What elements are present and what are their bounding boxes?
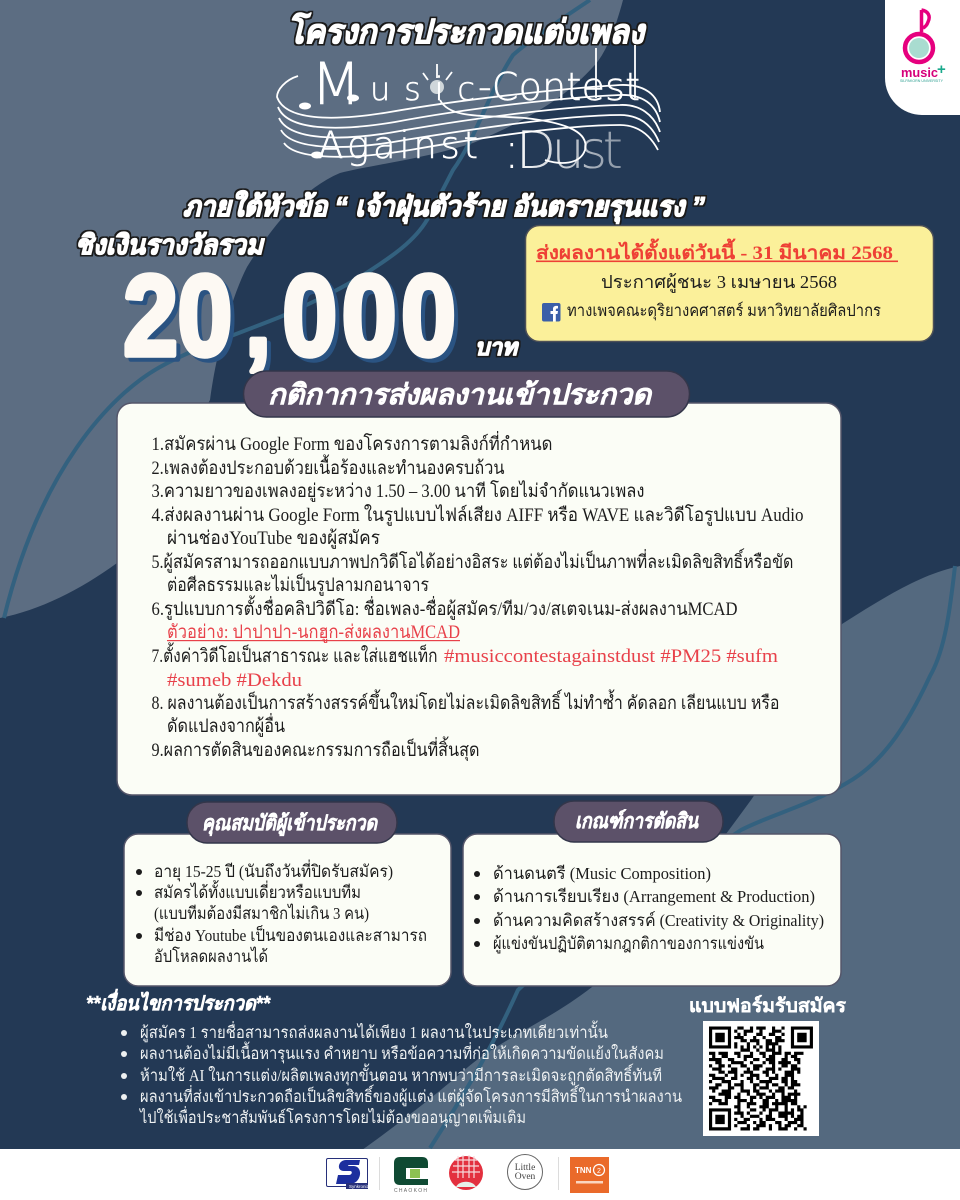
rules list: 5.ผู้สมัครสามารถออกแบบภาพปกวิดีโอได้อย่างอิสระ แต่ต้องไม่เป็นภาพที่ละเมิดลิขสิทธิ์หรือขัด — [152, 548, 794, 573]
heading pill: judging criteria: เกณฑ์การตัดสิน — [575, 809, 699, 833]
panel: dates — [526, 226, 934, 342]
conditions list: ไปใช้เพื่อประชาสัมพันธ์โครงการโดยไม่ต้องขออนุญาตเพิ่มเติม — [138, 1106, 526, 1128]
rules list: 3.ความยาวของเพลงอยู่ระหว่าง 1.50 – 3.00 นาที โดยไม่จำกัดแนวเพลง — [152, 480, 644, 502]
music contest logo: M — [311, 50, 361, 118]
rules list: ผ่านช่องYouTube ของผู้สมัคร — [167, 528, 380, 549]
prize amount: 2 — [127, 256, 182, 384]
conditions list: ผลงานต้องไม่มีเนื้อหารุนแรง คำหยาบ หรือข้อความที่ก่อให้เกิดความขัดแย้งในสังคม — [140, 1041, 664, 1064]
logo badge: Music+ Silpakorn University: music — [901, 65, 938, 80]
music contest logo: -Contest — [478, 65, 640, 109]
logo badge: Music+ Silpakorn University: SILPAKORN UNIVERSITY — [900, 79, 944, 83]
logo: Little Oven — [508, 1154, 542, 1190]
prize amount: 0 — [405, 256, 460, 384]
announcement date: ประกาศผู้ชนะ 3 เมษายน 2568 — [601, 272, 837, 293]
deadline: ส่งผลงานได้ตั้งแต่วันนี้ - 31 มีนาคม 2568 — [536, 238, 893, 264]
rules list: ต่อศีลธรรมและไม่เป็นรูปลามกอนาจาร — [167, 572, 429, 596]
logo: Little Oven: Oven — [515, 1172, 536, 1182]
logo badge: Music+ Silpakorn University — [885, 0, 960, 115]
prize amount: 0 — [342, 252, 396, 380]
criteria list: ด้านความคิดสร้างสรรค์ (Creativity & Originality) — [493, 911, 824, 930]
eligibility list: สมัครได้ทั้งแบบเดี่ยวหรือแบบทีม — [154, 880, 361, 902]
logo: TNN2: TNN — [575, 1166, 592, 1175]
prize amount: , — [246, 260, 271, 378]
logo: TNN2: 2 — [597, 1168, 601, 1175]
eligibility list — [136, 859, 427, 966]
rules list: 8. ผลงานต้องเป็นการสร้างสรรค์ขึ้นใหม่โดยไม่ละเมิดลิขสิทธิ์ ไม่ทำซ้ำ คัดลอก เลียนแบบ หรือ — [152, 689, 780, 714]
rules list: 2.เพลงต้องประกอบด้วยเนื้อร้องและทำนองครบถ้วน — [152, 454, 505, 479]
prize amount: 0 — [283, 252, 337, 380]
logo badge: Music+ Silpakorn University: + — [937, 61, 946, 78]
heading pill: eligibility: คุณสมบัติผู้เข้าประกวด — [202, 812, 378, 836]
rules list — [152, 431, 804, 762]
prize amount: 2 — [123, 252, 178, 380]
prize amount: 0 — [287, 256, 341, 384]
conditions list: ผลงานที่ส่งเข้าประกวดถือเป็นลิขสิทธิ์ของผู้แต่ง แต่ผู้จัดโครงการมีสิทธิ์ในการนำผลงาน — [140, 1084, 682, 1107]
panel: eligibility — [124, 834, 451, 986]
prize amount: 0 — [178, 252, 232, 380]
rules list: 7.ตั้งค่าวิดีโอเป็นสาธารณะ และใส่แฮชแท็ก — [152, 642, 438, 667]
conditions heading: **เงื่อนไขการประกวด** — [86, 989, 271, 1015]
logo: Synkronize: Synkronize — [349, 1184, 372, 1189]
rules list: 9.ผลการตัดสินของคณะกรรมการถือเป็นที่สิ้นสุด — [152, 736, 480, 762]
panel: rules — [117, 403, 841, 795]
rules list: 1.สมัครผ่าน Google Form ของโครงการตามลิงก์ที่กำหนด — [152, 431, 552, 455]
prize amount: , — [250, 264, 275, 382]
logo: Little Oven: Little — [515, 1163, 535, 1173]
prize amount: 0 — [401, 252, 456, 380]
application form heading: แบบฟอร์มรับสมัคร — [689, 995, 847, 1017]
logo: Synkronize — [326, 1158, 372, 1189]
logo: TNN2 — [570, 1157, 609, 1193]
heading pill: rules: กติกาการส่งผลงานเข้าประกวด — [268, 379, 653, 410]
heading pill: rules — [244, 371, 690, 417]
criteria list — [474, 864, 824, 954]
logo: shell emblem — [449, 1155, 483, 1190]
subtitle: ภายใต้หัวข้อ “ เจ้าฝุ่นตัวร้าย อันตรายรุนแรง ” — [183, 190, 705, 224]
QR code — [703, 1021, 819, 1136]
rules list: 4.ส่งผลงานผ่าน Google Form ในรูปแบบไฟล์เสียง AIFF หรือ WAVE และวิดีโอรูปแบบ Audio — [152, 504, 804, 526]
rules list: ดัดแปลงจากผู้อื่น — [167, 713, 285, 737]
icon: facebook — [542, 303, 560, 322]
currency label: บาท — [475, 334, 519, 360]
heading pill: judging criteria — [554, 801, 723, 842]
logo: Chaokoh — [394, 1157, 428, 1194]
prize amount: 0 — [346, 256, 400, 384]
rules list: ตัวอย่าง: ปาปาปา-นกฮูก-ส่งผลงานMCAD — [167, 623, 460, 643]
prize label: ชิงเงินรางวัลรวม — [75, 230, 265, 260]
rules list: 6.รูปแบบการตั้งชื่อคลิปวิดีโอ: ชื่อเพลง-ชื่อผู้สมัคร/ทีม/วง/สเตจเนม-ส่งผลงานMCAD — [152, 595, 738, 620]
music contest logo — [277, 45, 660, 181]
prize amount: 0 — [182, 256, 236, 384]
eligibility list: (แบบทีมต้องมีสมาชิกไม่เกิน 3 คน) — [154, 903, 369, 923]
conditions list: ผู้สมัคร 1 รายชื่อสามารถส่งผลงานได้เพียง 1 ผลงานในประเภทเดียวเท่านั้น — [140, 1020, 608, 1043]
eligibility list: มีช่อง Youtube เป็นของตนเองและสามารถ — [154, 924, 427, 945]
panel: judging criteria — [463, 834, 841, 986]
facebook page: ทางเพจคณะดุริยางคศาสตร์ มหาวิทยาลัยศิลปากร — [567, 301, 881, 321]
music contest logo: usic — [370, 70, 475, 108]
logo: Chaokoh: CHAOKOH — [394, 1188, 427, 1194]
rules list: #musiccontestagainstdust #PM25 #sufm — [444, 647, 779, 667]
title: โครงการประกวดแต่งเพลง — [287, 12, 647, 50]
criteria list: ผู้แข่งขันปฏิบัติตามกฎกติกาของการแข่งขัน — [493, 934, 764, 954]
conditions list — [121, 1020, 682, 1128]
eligibility list: อายุ 15-25 ปี (นับถึงวันที่ปิดรับสมัคร) — [154, 859, 393, 882]
rules list: #sumeb #Dekdu — [167, 671, 302, 691]
music contest logo: Against — [318, 124, 478, 167]
sponsor bar — [0, 1149, 960, 1200]
conditions list: ห้ามใช้ AI ในการแต่ง/ผลิตเพลงทุกขั้นตอน หากพบว่ามีการละเมิดจะถูกตัดสิทธิ์ทันที — [140, 1063, 662, 1086]
eligibility list: อัปโหลดผลงานได้ — [154, 946, 268, 966]
prize amount — [123, 252, 460, 384]
criteria list: ด้านดนตรี (Music Composition) — [493, 864, 711, 883]
heading pill: eligibility — [187, 802, 397, 843]
music contest logo: :Dust — [503, 121, 623, 181]
criteria list: ด้านการเรียบเรียง (Arrangement & Production) — [493, 887, 815, 906]
